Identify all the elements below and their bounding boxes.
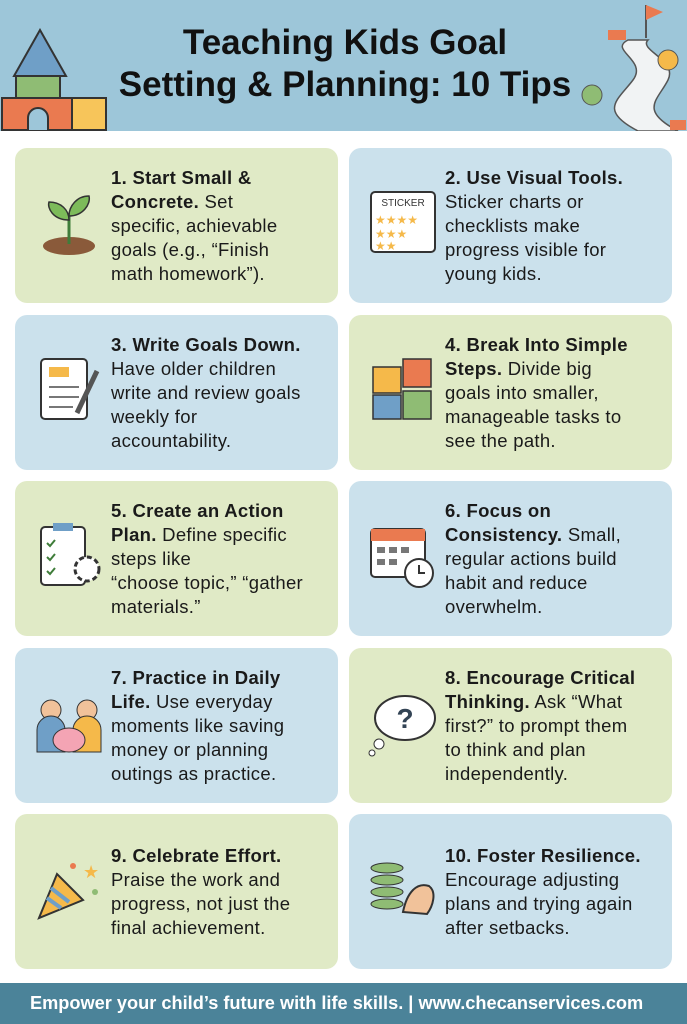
text: overwhelm.	[445, 596, 543, 617]
text: moments like saving	[111, 715, 284, 736]
text: habit and reduce	[445, 572, 588, 593]
text: specific, achievable	[111, 215, 277, 236]
icon: clipboard gear	[40, 523, 100, 586]
icon: calendar clock	[370, 528, 434, 588]
text: first?” to prompt them	[445, 715, 627, 736]
text: checklists make	[445, 215, 580, 236]
icon: road with flags	[582, 5, 686, 131]
text: young kids.	[445, 263, 542, 284]
text: Concrete. Set	[111, 191, 233, 212]
icon: sticker chart: ★★★	[375, 227, 407, 241]
text	[111, 845, 290, 938]
text	[445, 667, 635, 784]
icon: sticker chart: ★★	[375, 239, 397, 253]
icon: notebook	[40, 358, 100, 420]
text: weekly for	[111, 406, 197, 427]
footer	[0, 983, 687, 1024]
text: 5. Create an Action	[111, 500, 284, 521]
text: Have older children	[111, 358, 276, 379]
text: Praise the work and	[111, 869, 280, 890]
icon: spring and arm	[370, 862, 434, 915]
text: 3. Write Goals Down.	[111, 334, 301, 355]
icon: party popper: ★	[83, 862, 99, 882]
text: accountability.	[111, 430, 231, 451]
text: 9. Celebrate Effort.	[111, 845, 282, 866]
text: 4. Break Into Simple	[445, 334, 628, 355]
panel: tip 10	[349, 814, 672, 969]
panel: tip 7	[15, 648, 338, 803]
text: 1. Start Small &	[111, 167, 252, 188]
text: progress visible for	[445, 239, 606, 260]
icon: family piggy bank	[36, 700, 102, 752]
text	[111, 500, 303, 617]
text: Sticker charts or	[445, 191, 584, 212]
text: 8. Encourage Critical	[445, 667, 635, 688]
text: independently.	[445, 763, 568, 784]
text	[445, 845, 641, 938]
text: Life. Use everyday	[111, 691, 273, 712]
text	[111, 167, 277, 284]
text: 10. Foster Resilience.	[445, 845, 641, 866]
header	[0, 0, 687, 131]
text: write and review goals	[111, 382, 301, 403]
text: Thinking. Ask “What	[445, 691, 622, 712]
icon: thought bubble: ?	[396, 703, 414, 734]
text: steps like	[111, 548, 191, 569]
text: plans and trying again	[445, 893, 633, 914]
panel: tip 6	[349, 481, 672, 636]
icon: sprout	[43, 195, 95, 255]
text	[445, 500, 621, 617]
text: math homework”).	[111, 263, 265, 284]
text: see the path.	[445, 430, 556, 451]
icon: blocks	[1, 28, 107, 131]
text: goals (e.g., “Finish	[111, 239, 269, 260]
panel: tip 8	[349, 648, 672, 803]
text: outings as practice.	[111, 763, 276, 784]
icon: puzzle	[372, 358, 432, 420]
footer: Empower your child’s future with life skills. | www.checanservices.com	[30, 993, 643, 1013]
text	[445, 334, 628, 451]
title: Setting & Planning: 10 Tips	[119, 65, 571, 104]
panel: tip 4	[349, 315, 672, 470]
text: money or planning	[111, 739, 268, 760]
panel: tip 3	[15, 315, 338, 470]
icon: party popper	[37, 862, 99, 920]
text: 2. Use Visual Tools.	[445, 167, 623, 188]
text: progress, not just the	[111, 893, 290, 914]
text: goals into smaller,	[445, 382, 599, 403]
text	[445, 167, 623, 284]
panel: tip 1	[15, 148, 338, 303]
text: Steps. Divide big	[445, 358, 592, 379]
title: Teaching Kids Goal	[183, 23, 507, 62]
text: 7. Practice in Daily	[111, 667, 281, 688]
text: materials.”	[111, 596, 201, 617]
text: manageable tasks to	[445, 406, 621, 427]
icon: sticker chart: STICKER	[381, 198, 425, 209]
text: after setbacks.	[445, 917, 570, 938]
icon: sticker chart	[370, 191, 436, 253]
text: Plan. Define specific	[111, 524, 287, 545]
text: final achievement.	[111, 917, 266, 938]
text: regular actions build	[445, 548, 617, 569]
text: Consistency. Small,	[445, 524, 621, 545]
text: to think and plan	[445, 739, 586, 760]
icon: sticker chart: ★★★★	[375, 213, 418, 227]
panel: tip 5	[15, 481, 338, 636]
text: Encourage adjusting	[445, 869, 619, 890]
text	[111, 667, 284, 784]
text	[111, 334, 301, 451]
panel: tip 2	[349, 148, 672, 303]
text: “choose topic,” “gather	[111, 572, 303, 593]
title	[119, 23, 571, 104]
icon: thought bubble	[368, 695, 436, 756]
text: 6. Focus on	[445, 500, 551, 521]
panel: tip 9	[15, 814, 338, 969]
